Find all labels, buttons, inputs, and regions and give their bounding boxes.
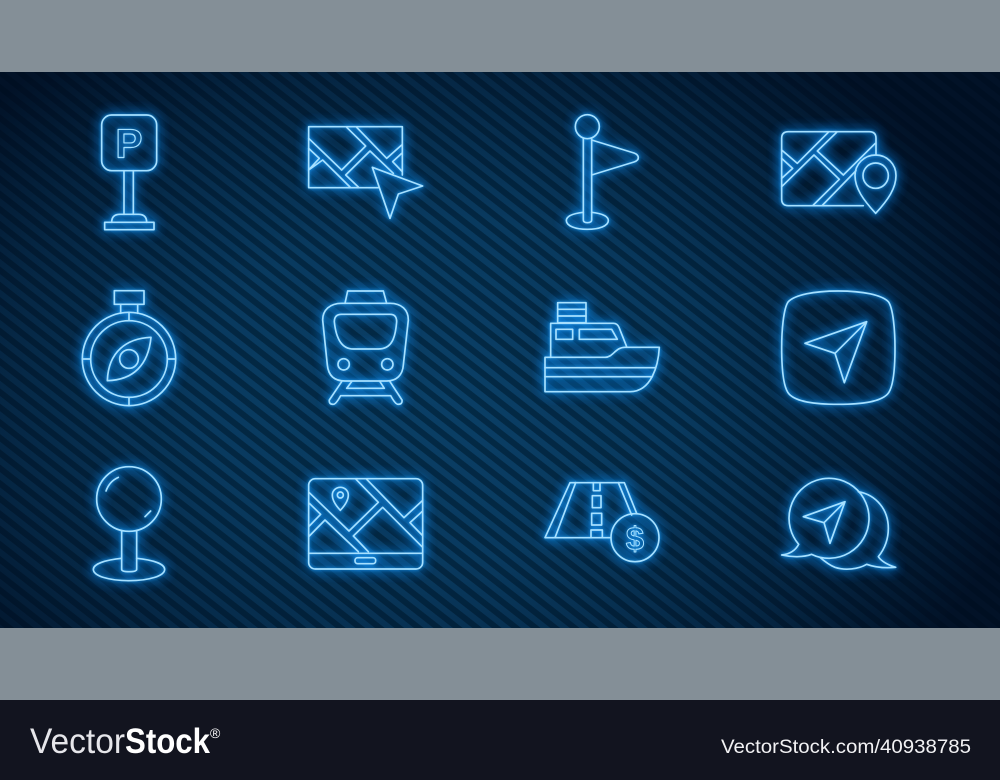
footer url: VectorStock.com/40938785 bbox=[721, 736, 971, 758]
icon: tablet with map bbox=[309, 479, 423, 569]
footer bar bbox=[0, 700, 1000, 780]
top grey band bbox=[0, 0, 1000, 72]
icon: toll road with dollar coin bbox=[545, 483, 659, 562]
bottom grey band bbox=[0, 628, 1000, 700]
icon: navigation arrow in rounded square bbox=[782, 291, 895, 404]
icon: train bbox=[323, 291, 408, 404]
icon: ship bbox=[545, 303, 659, 392]
footer logo: VectorStock: Vector bbox=[30, 722, 125, 761]
icon: toll road with dollar coin: $ bbox=[626, 519, 644, 556]
icon: map with location pin bbox=[782, 132, 896, 213]
panel: striped dark blue background bbox=[0, 72, 1000, 628]
icon: chat bubbles with navigation arrow bbox=[782, 478, 896, 569]
icon: flag on pole bbox=[566, 115, 638, 229]
footer logo: VectorStock bbox=[30, 722, 221, 761]
icon: parking sign bbox=[102, 115, 157, 230]
icon: compass bbox=[82, 291, 176, 406]
icon: map pin push marker bbox=[93, 467, 165, 581]
icon: parking sign: P bbox=[115, 120, 142, 166]
footer logo: VectorStock: Stock bbox=[125, 722, 210, 761]
footer logo: VectorStock: ® bbox=[210, 725, 221, 741]
icon: map with cursor arrow bbox=[309, 127, 423, 218]
